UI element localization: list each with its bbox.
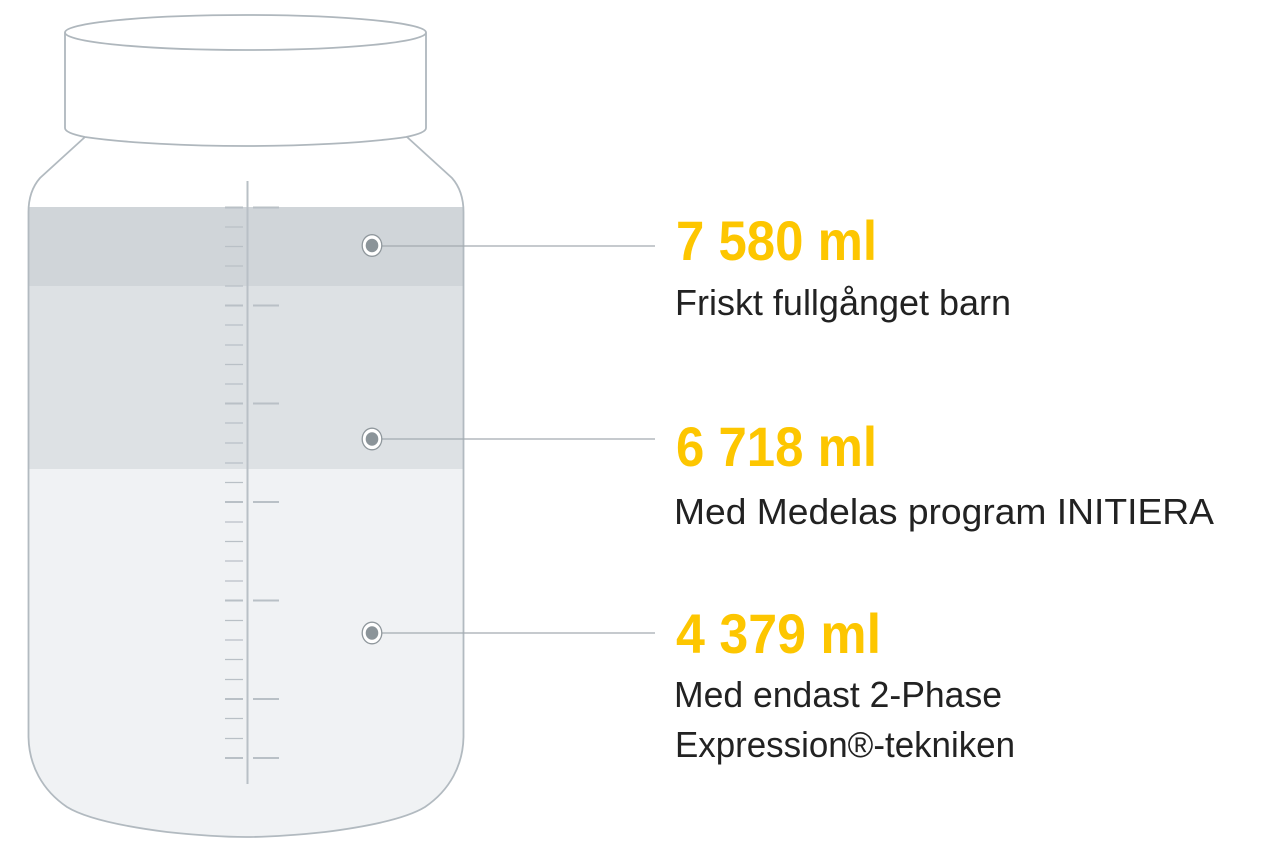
label: Friskt fullgånget barn: Friskt fullgånget barn bbox=[675, 282, 1011, 323]
value: 7 580 ml: 7 580 ml bbox=[676, 209, 877, 272]
value: 6 718 ml: 6 718 ml bbox=[676, 415, 877, 478]
label: Med endast 2-Phase: Med endast 2-Phase bbox=[674, 674, 1002, 715]
jar bbox=[20, 15, 472, 844]
milk levels bbox=[20, 207, 472, 844]
measuring scale bbox=[225, 181, 279, 784]
marker: 4 379 ml bbox=[362, 622, 655, 644]
label: Med Medelas program INITIERA: Med Medelas program INITIERA bbox=[674, 491, 1214, 532]
jar lid bbox=[65, 15, 426, 146]
marker: 7 580 ml bbox=[362, 235, 655, 256]
marker: 6 718 ml bbox=[362, 428, 655, 450]
value: 4 379 ml: 4 379 ml bbox=[676, 602, 881, 665]
jar body outline bbox=[28, 137, 464, 837]
label: Expression®-tekniken: Expression®-tekniken bbox=[675, 724, 1015, 765]
